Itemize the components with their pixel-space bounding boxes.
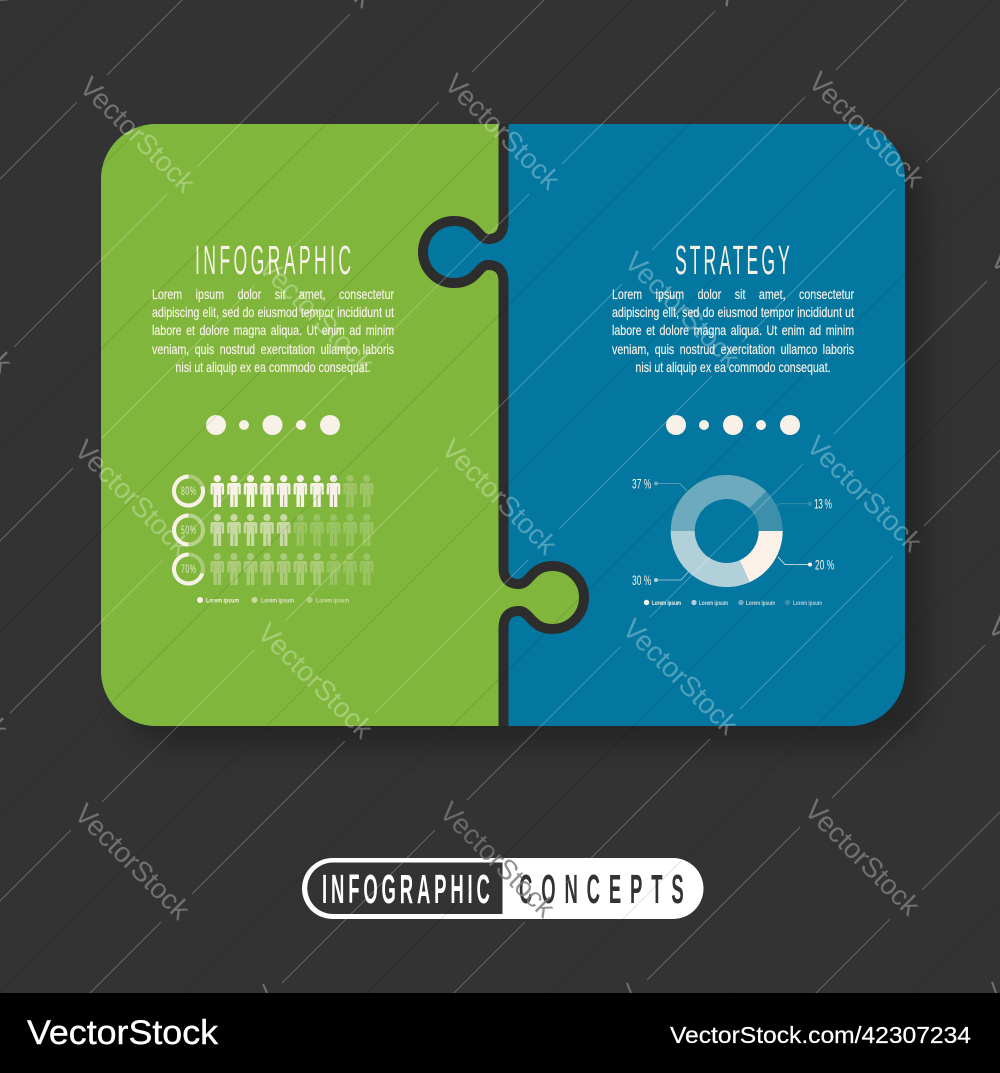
watermarks: VectorStock: [619, 246, 747, 374]
footer id: VectorStock.com/42307234: [670, 1022, 971, 1048]
watermarks: VectorStock: [434, 796, 562, 924]
segment 37%: [671, 475, 766, 531]
watermarks: VectorStock: [436, 433, 564, 561]
text block: strategy body: Lorem ipsum dolor sit amet, consectetur: [612, 286, 854, 302]
text block: strategy body: [612, 286, 854, 376]
watermarks: VectorStock: [253, 251, 381, 379]
people chart: [170, 473, 374, 604]
segment 20%: [740, 531, 783, 582]
banner dark block: [307, 862, 502, 914]
watermarks: VectorStock: [69, 434, 197, 562]
row 80%: 80%: [181, 485, 196, 499]
watermarks: VectorStock: [803, 66, 931, 194]
panel: strategy (blue): [101, 124, 905, 726]
row 50%: [174, 514, 374, 546]
row 50%: 50%: [181, 524, 196, 538]
legend: people chart: Lorem ipsum: [316, 598, 349, 604]
callout 13%: [772, 498, 832, 512]
legend: donut chart: Lorem ipsum: [699, 600, 728, 607]
text block: infographic body: [152, 286, 394, 376]
banner: infographic concepts: [302, 858, 704, 919]
row 80%: [170, 473, 374, 509]
row 70%: [170, 551, 374, 587]
watermarks: VectorStock: [439, 68, 567, 196]
text block: infographic body: nisi ut aliquip ex ea commodo consequat.: [175, 359, 371, 375]
callout 20%: [778, 557, 834, 573]
row 70%: 70%: [181, 563, 196, 577]
text block: strategy body: adipiscing elit, sed do eiusmod tempor incididunt ut: [612, 304, 854, 320]
callout 20%: 20 %: [815, 559, 834, 573]
dots: right: [666, 415, 800, 435]
callout 30%: [632, 570, 690, 589]
footer bar: [0, 993, 1000, 1073]
donut chart: [632, 475, 834, 589]
watermarks: VectorStock: [74, 71, 202, 199]
heading: strategy: STRATEGY: [675, 236, 790, 283]
panel shadow: [122, 145, 926, 747]
text block: infographic body: adipiscing elit, sed do eiusmod tempor incididunt ut: [152, 304, 394, 320]
panel: infographic (green): [101, 124, 584, 726]
banner pill: [302, 858, 704, 919]
legend: donut chart: Lorem ipsum: [793, 600, 822, 607]
watermarks: VectorStock: [252, 617, 380, 745]
watermarks: VectorStock: [617, 613, 745, 741]
callout 30%: 30 %: [632, 574, 651, 589]
text block: infographic body: labore et dolore magna aliqua. Ut enim ad minim: [152, 322, 394, 338]
legend: people chart: Lorem ipsum: [261, 598, 294, 604]
callout 37%: 37 %: [632, 478, 651, 492]
text block: strategy body: veniam, quis nostrud exercitation ullamco laboris: [612, 341, 854, 357]
callout 37%: [632, 478, 687, 492]
legend: people chart: Lorem ipsum: [206, 598, 239, 604]
banner text: concepts: CONCEPTS: [519, 866, 684, 912]
text block: infographic body: veniam, quis nostrud exercitation ullamco laboris: [152, 341, 394, 357]
banner text: infographic: INFOGRAPHIC: [322, 866, 490, 912]
legend: people chart: [197, 597, 349, 604]
heading: infographic: INFOGRAPHIC: [195, 236, 351, 283]
text block: strategy body: labore et dolore magna aliqua. Ut enim ad minim: [612, 322, 854, 338]
legend: donut chart: Lorem ipsum: [746, 600, 775, 607]
segment 13%: [749, 491, 783, 531]
callout 13%: 13 %: [814, 498, 832, 512]
legend: donut chart: [644, 600, 822, 607]
puzzle divider: [423, 124, 584, 726]
text block: infographic body: Lorem ipsum dolor sit amet, consectetur: [152, 286, 394, 302]
watermarks: VectorStock: [69, 798, 197, 926]
footer brand: VectorStock: [27, 1014, 219, 1052]
dots: left: [206, 415, 340, 435]
legend: donut chart: Lorem ipsum: [652, 600, 681, 607]
segment 30%: [671, 531, 750, 587]
watermarks: VectorStock: [801, 430, 929, 558]
text block: strategy body: nisi ut aliquip ex ea commodo consequat.: [635, 359, 831, 375]
watermarks: VectorStock: [799, 794, 927, 922]
